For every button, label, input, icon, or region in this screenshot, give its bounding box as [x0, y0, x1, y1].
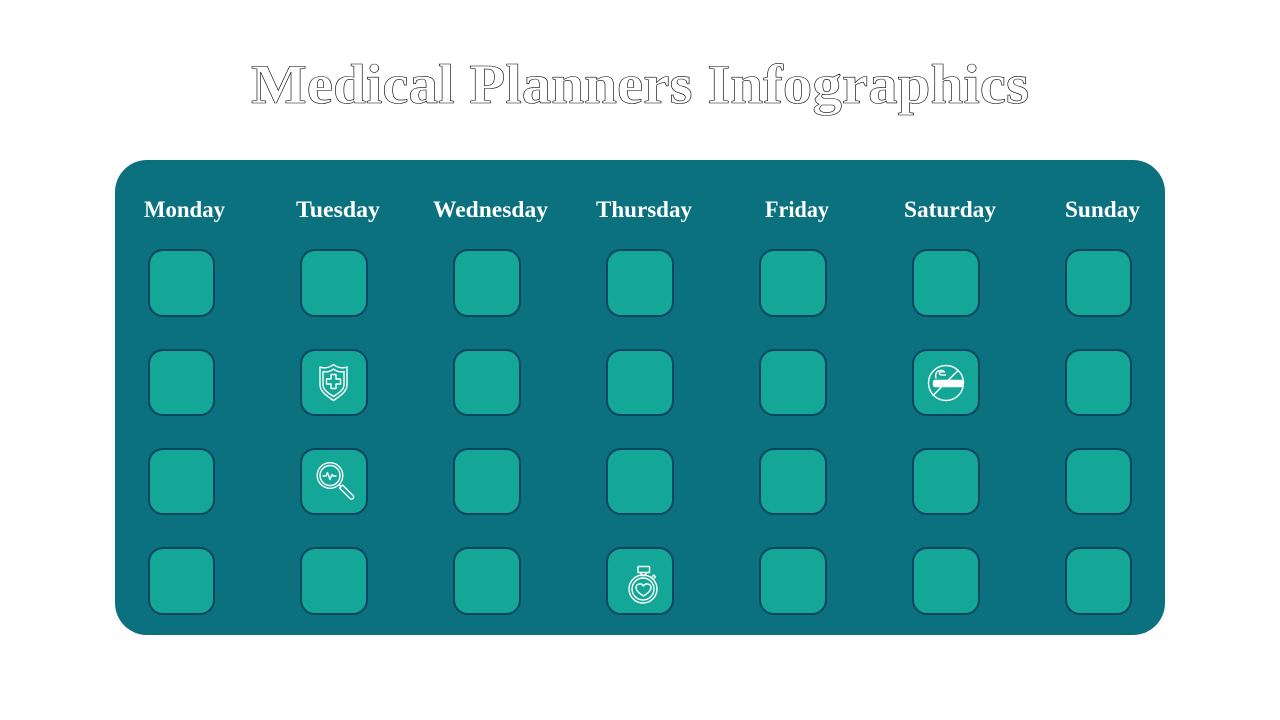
icon: magnifier with pulse: [317, 463, 354, 499]
icon: no smoking: [928, 366, 964, 400]
icon: medical shield: [320, 364, 347, 400]
heading: Tuesday: Tuesday: [296, 197, 381, 222]
planner cells grid: [149, 250, 1131, 614]
day headings: [144, 197, 1140, 222]
heading: Monday: Monday: [144, 197, 225, 222]
heading: Saturday: Saturday: [904, 197, 996, 222]
heading: Thursday: Thursday: [596, 197, 693, 222]
title: Medical Planners Infographics: [251, 54, 1029, 116]
heading: Sunday: Sunday: [1065, 197, 1140, 222]
panel: planner calendar: [115, 160, 1165, 635]
heading: Wednesday: Wednesday: [433, 197, 548, 222]
icon: heart stopwatch: [629, 566, 657, 603]
heading: Friday: Friday: [765, 197, 829, 222]
